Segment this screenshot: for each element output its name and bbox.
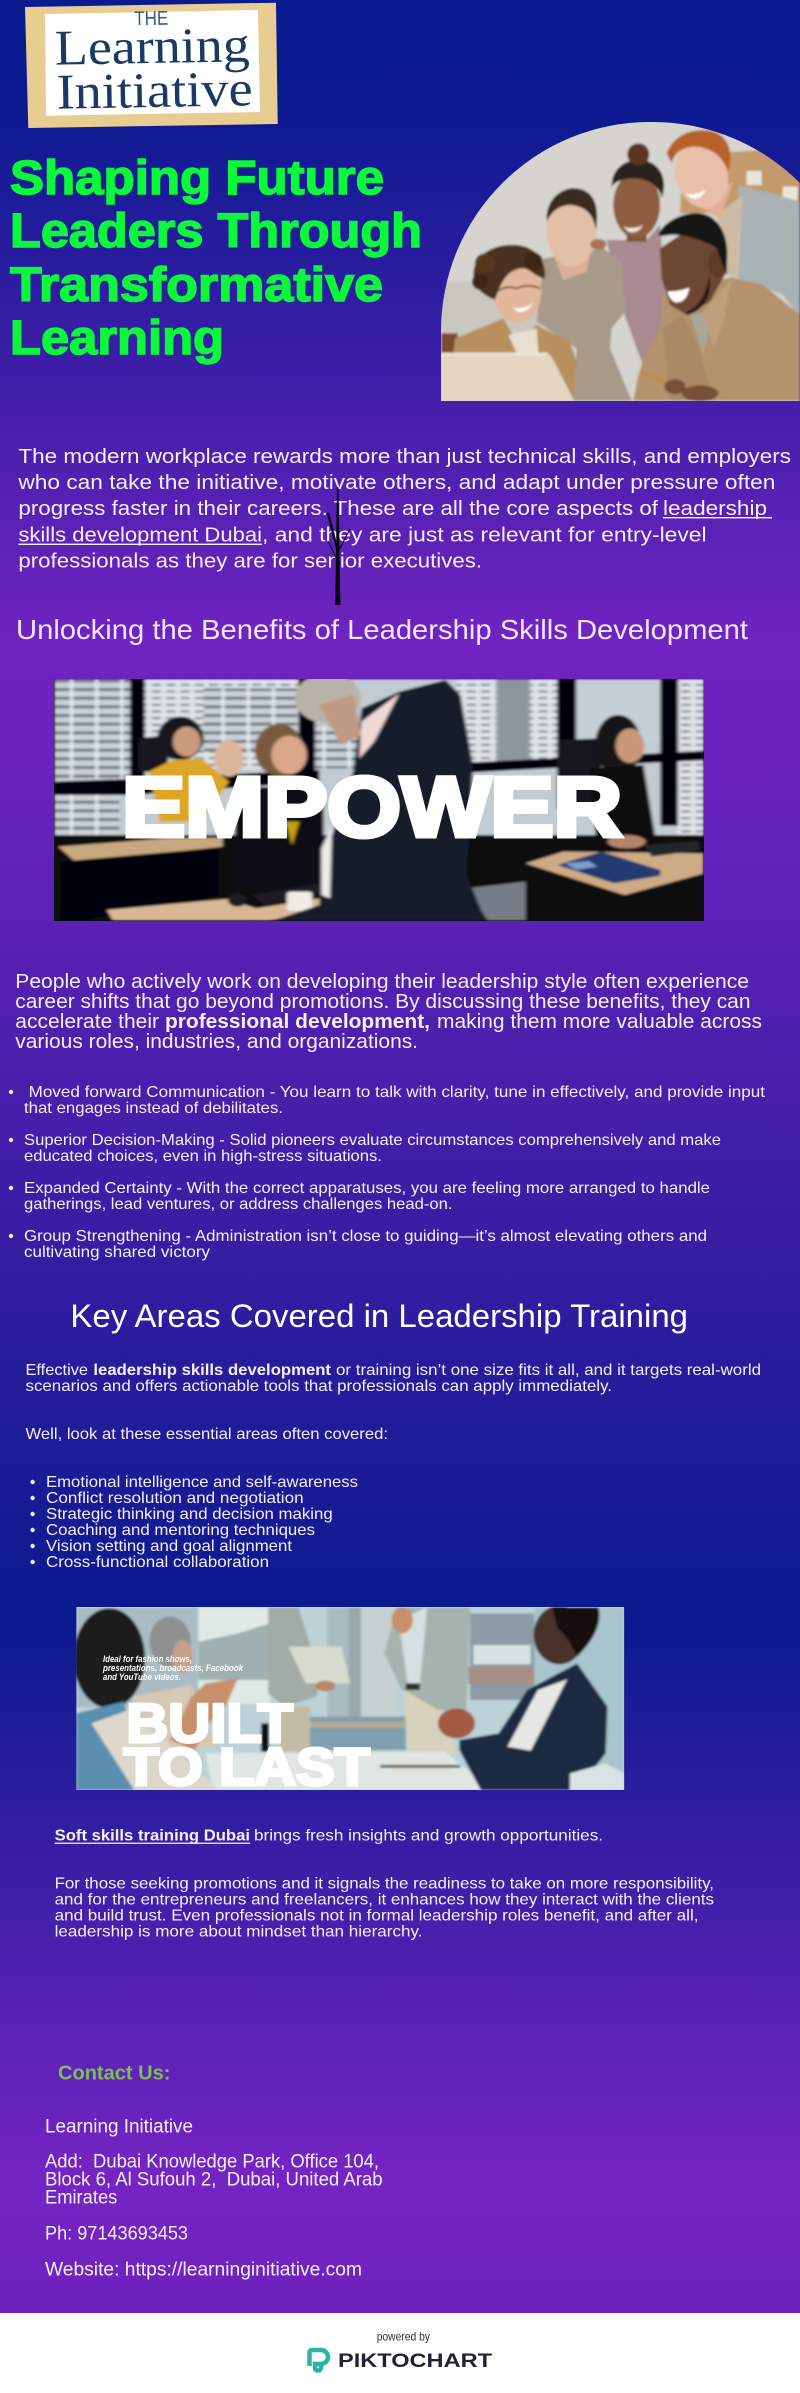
logo: The Learning Initiative: THE [134, 8, 168, 30]
soft skills sentence: brings fresh insights and growth opportunities. [254, 1828, 603, 1845]
benefits bullet list [9, 1084, 766, 1261]
contact details: Block 6, Al Sufouh 2, Dubai, United Arab [45, 2170, 383, 2191]
essential areas bullet list: Cross-functional collaboration [46, 1554, 269, 1571]
essential areas bullet list: Vision setting and goal alignment [46, 1538, 293, 1555]
image caption word: BUILT TO LAST: TO LAST [124, 1738, 370, 1797]
essential areas bullet list: Conflict resolution and negotiation [46, 1490, 304, 1507]
intro paragraph: , and they are just as relevant for entry-level [262, 524, 707, 547]
paragraph: promotions and mindset: For those seeking promotions and it signals the readiness to take on more responsibility, [55, 1876, 714, 1893]
footer: powered by Piktochart: powered by [377, 2330, 430, 2344]
paragraph: effective training: Effective [26, 1362, 88, 1379]
paragraph: career shifts: professional development, [165, 1010, 430, 1033]
intro paragraph: skills development Dubai [18, 524, 262, 547]
heading: Unlocking the Benefits: Unlocking the Benefits of Leadership Skills Development [16, 614, 748, 645]
image caption: small tagline: presentations, broadcasts, Facebook [102, 1663, 244, 1673]
paragraph: promotions and mindset: and build trust. Even professionals not in formal leadership roles benefit, and after all, [55, 1908, 699, 1925]
paragraph: promotions and mindset: and for the entrepreneurs and freelancers, it enhances how they interact with the clients [55, 1892, 714, 1909]
intro paragraph: professionals as they are for senior executives. [18, 550, 482, 573]
intro paragraph: progress faster in their careers. These are all the core aspects of [18, 497, 658, 520]
benefits bullet list: Expanded Certainty - With the correct apparatuses, you are feeling more arranged to handle [24, 1180, 710, 1197]
footer: powered by Piktochart [0, 2313, 800, 2393]
essential areas bullet list [30, 1474, 358, 1571]
intro paragraph: leadership [663, 497, 767, 520]
benefits bullet list: cultivating shared victory [24, 1244, 210, 1261]
paragraph: effective training [26, 1362, 761, 1395]
contact details: Website: https://learninginitiative.com [45, 2260, 362, 2281]
benefits bullet list: that engages instead of debilitates. [24, 1100, 283, 1117]
contact details: Add: Dubai Knowledge Park, Office 104, [45, 2152, 379, 2173]
essential areas bullet list: Coaching and mentoring techniques [46, 1522, 315, 1539]
paragraph: career shifts: accelerate their [15, 1010, 159, 1033]
image caption word: BUILT TO LAST: BUILT [126, 1692, 293, 1754]
paragraph: promotions and mindset [55, 1876, 714, 1941]
paragraph: career shifts [15, 970, 762, 1053]
benefits bullet list: Group Strengthening - Administration isn’t close to guiding—it’s almost elevating others and [24, 1228, 707, 1245]
benefits bullet list: gatherings, lead ventures, or address challenges head-on. [24, 1196, 452, 1213]
intro paragraph: The modern workplace rewards more than just technical skills, and employers [18, 445, 791, 468]
benefits bullet list: Moved forward Communication - You learn to talk with clarity, tune in effectively, and provide input [29, 1084, 766, 1101]
contact details: Learning Initiative [45, 2117, 193, 2138]
intro paragraph: who can take the initiative, motivate others, and adapt under pressure often [17, 471, 775, 494]
soft skills sentence [55, 1828, 603, 1845]
arrow: stray black tree-like stroke [328, 487, 350, 605]
benefits bullet list: Superior Decision-Making - Solid pioneers evaluate circumstances comprehensively and make [24, 1132, 721, 1149]
photo: BUILT TO LAST meeting scene [74, 1606, 624, 1797]
text: well, look at these: Well, look at these essential areas often covered: [26, 1426, 388, 1443]
contact details: Ph: 97143693453 [45, 2224, 188, 2245]
image caption: small tagline: Ideal for fashion shows, [103, 1654, 192, 1664]
soft skills sentence: Soft skills training Dubai [55, 1828, 250, 1845]
title [10, 152, 422, 365]
contact heading: Contact Us: [58, 2062, 170, 2084]
image caption: small tagline [102, 1654, 244, 1682]
photo: team around a laptop [430, 115, 800, 405]
logo: The Learning Initiative: Learning [54, 16, 250, 76]
icon: Piktochart logo mark [310, 2350, 328, 2370]
paragraph: effective training: or training isn’t one size fits it all, and it targets real-world [336, 1362, 761, 1379]
benefits bullet list: educated choices, even in high-stress situations. [24, 1148, 382, 1165]
logo: The Learning Initiative: Initiative [56, 60, 253, 120]
logo: The Learning Initiative [25, 3, 278, 128]
contact details: Emirates [45, 2188, 117, 2209]
image caption word: BUILT TO LAST [124, 1692, 370, 1797]
paragraph: career shifts: career shifts that go beyond promotions. By discussing these benefits, they can [15, 990, 751, 1013]
essential areas bullet list: Emotional intelligence and self-awareness [46, 1474, 358, 1491]
image caption: small tagline: and YouTube videos. [103, 1672, 181, 1682]
title: Transformative [10, 259, 383, 312]
paragraph: effective training: scenarios and offers actionable tools that professionals can apply immediately. [26, 1378, 612, 1395]
title: Shaping Future [10, 152, 384, 205]
title: Leaders Through [10, 205, 422, 258]
paragraph: career shifts: making them more valuable across [437, 1010, 762, 1033]
paragraph: effective training: leadership skills development [93, 1362, 332, 1379]
paragraph: promotions and mindset: leadership is more about mindset than hierarchy. [55, 1924, 422, 1941]
paragraph: career shifts: People who actively work on developing their leadership style often experience [15, 970, 749, 993]
title: Learning [10, 312, 224, 365]
footer: powered by Piktochart: PIKTOCHART [338, 2351, 492, 2372]
photo: EMPOWER office scene [54, 673, 705, 921]
intro paragraph [17, 445, 791, 573]
image caption word: EMPOWER: EMPOWER [122, 760, 622, 854]
essential areas bullet list: Strategic thinking and decision making [46, 1506, 333, 1523]
heading: Key Areas Covered: Key Areas Covered in Leadership Training [70, 1298, 688, 1334]
paragraph: career shifts: various roles, industries, and organizations. [15, 1030, 418, 1053]
contact details [45, 2117, 383, 2281]
